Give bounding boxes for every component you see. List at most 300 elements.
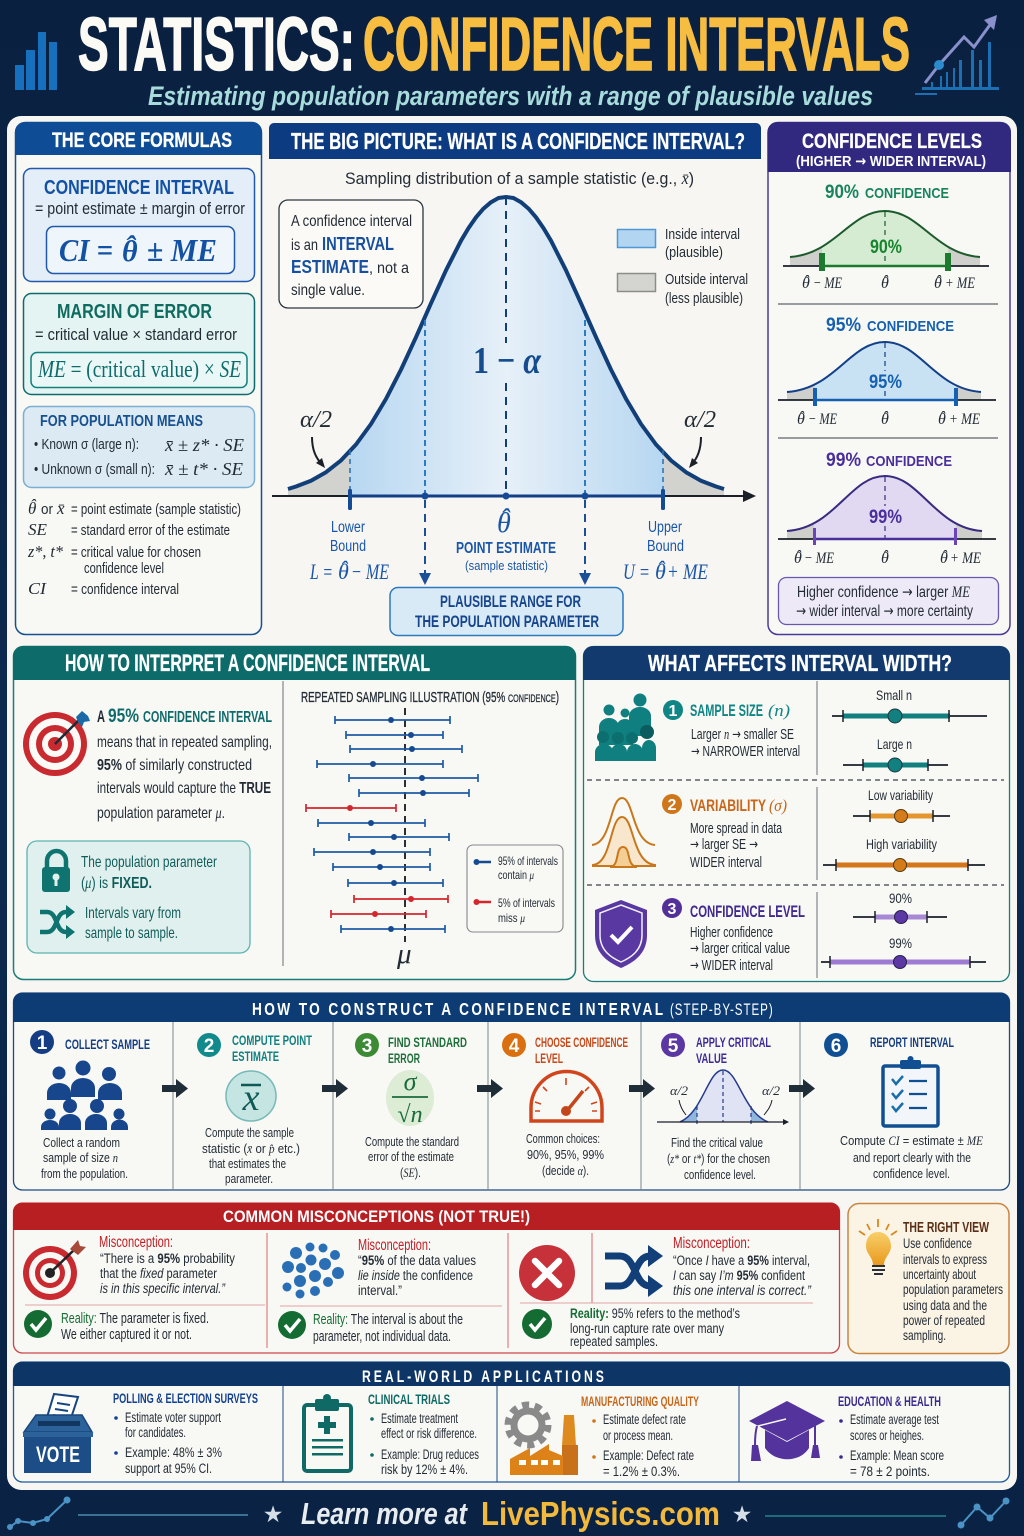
- heading: applications: [13, 1362, 1010, 1387]
- callout: plausible range: [390, 588, 623, 636]
- definitions: x̄: [56, 499, 65, 518]
- legend: intervals: miss μ: [498, 911, 525, 925]
- level: 90 percent: + ME: [945, 275, 975, 292]
- application: polling: for candidates.: [125, 1425, 186, 1440]
- step 2: ESTIMATE: [232, 1049, 279, 1064]
- level: 90 percent: ˆ: [936, 273, 942, 290]
- application: manufacturing: MANUFACTURING QUALITY: [581, 1394, 699, 1409]
- level: 99 percent: + ME: [950, 550, 981, 567]
- definitions: ˆ: [30, 496, 37, 515]
- interval bars: variability: [823, 787, 985, 872]
- application: polling: [23, 1391, 258, 1476]
- level: 95 percent: θ: [881, 411, 889, 428]
- definitions: CI: [28, 579, 47, 598]
- panel: how to construct: [13, 993, 1010, 1190]
- panel: how to interpret: [13, 646, 576, 980]
- factor: variability: [662, 794, 787, 871]
- misconception 2: Reality: The interval is about the: [313, 1312, 463, 1328]
- panel: big picture: [269, 123, 761, 636]
- level: 95 percent: + ME: [949, 411, 980, 428]
- heading: repeated sampling: REPEATED SAMPLING ILLUSTRATION (95% CONFIDENCE): [301, 689, 559, 706]
- arrows to plausible range: [419, 500, 591, 585]
- box: fixed parameter: Intervals vary from: [85, 905, 181, 922]
- step 4: (decide α).: [542, 1163, 589, 1178]
- step 5: (z* or t*) for the chosen: [667, 1151, 770, 1166]
- confidence interval box: CI =: [59, 232, 113, 268]
- chart: repeated intervals: [306, 708, 478, 942]
- box: fixed parameter: The population parameter: [81, 854, 217, 871]
- factor: variability: 2: [668, 797, 677, 814]
- level: 90 percent: θ: [934, 275, 942, 292]
- interval bars: sample size: Small n: [876, 687, 912, 703]
- icon: people: [41, 1060, 128, 1130]
- definitions: = confidence interval: [71, 582, 179, 598]
- arrow 2 to 3: [322, 1079, 348, 1098]
- level: 99 percent: [778, 450, 996, 567]
- step 6: Compute CI = estimate ± ME: [840, 1133, 983, 1148]
- text: definition: 95% of similarly constructed: [97, 757, 252, 774]
- icon: medical clipboard: [304, 1394, 351, 1471]
- callout: plausible range: THE POPULATION PARAMETER: [415, 613, 599, 631]
- icon: gear and factory: [508, 1405, 578, 1475]
- factor: confidence level: CONFIDENCE LEVEL: [690, 902, 805, 921]
- title: STATISTICS:: [78, 2, 355, 86]
- step 6: [824, 1033, 983, 1181]
- application: education: Example: Mean score: [850, 1448, 944, 1463]
- callout: interval estimate: ESTIMATE: [291, 257, 369, 277]
- step 1: Collect a random: [43, 1135, 120, 1150]
- misconception 1: that the fixed parameter: [100, 1266, 217, 1281]
- step 6: and report clearly with the: [853, 1150, 971, 1165]
- step 5: VALUE: [696, 1051, 727, 1066]
- text: definition: intervals would capture the TRUE: [97, 780, 271, 797]
- lower bound: Lower: [331, 519, 365, 536]
- factor: sample size: 1: [669, 703, 678, 720]
- panel: the right view: THE RIGHT VIEW: [903, 1219, 990, 1236]
- step 3: √n: [397, 1102, 423, 1128]
- population means box: FOR POPULATION MEANS: [40, 413, 203, 430]
- misconception 2: lie inside the confidence: [358, 1268, 473, 1283]
- step 3: 3: [362, 1036, 372, 1057]
- note: higher confidence: Higher confidence → larger ME: [797, 583, 970, 601]
- legend: intervals: 5% of intervals: [498, 896, 555, 910]
- chart: critical value: α/2: [762, 1083, 781, 1098]
- misconception 1: Reality: The parameter is fixed.: [61, 1311, 209, 1327]
- level: 99 percent: ˆ: [942, 548, 948, 565]
- step 2: that estimates the: [209, 1156, 286, 1171]
- level: 95 percent: − ME: [808, 411, 837, 428]
- point estimate: [456, 504, 556, 573]
- level: 90 percent: 90%: [870, 237, 902, 258]
- legend: Inside interval: [665, 226, 740, 243]
- panel: the right view: using data and the: [903, 1297, 987, 1313]
- icon: shuffle: [40, 905, 75, 939]
- icon: star left: ★: [263, 1501, 283, 1527]
- step 1: [30, 1030, 150, 1181]
- note: higher confidence: → wider interval → more certainty: [796, 602, 973, 620]
- level: 99 percent: θ: [794, 550, 802, 567]
- factor: sample size: Larger n → smaller SE: [691, 727, 794, 743]
- icon: shield: [595, 900, 647, 968]
- misconception 3: Reality: 95% refers to the method’s: [570, 1306, 740, 1321]
- step 2: COMPUTE POINT: [232, 1033, 313, 1048]
- legend: intervals: [467, 845, 563, 932]
- interval bars: sample size: Large n: [877, 736, 912, 752]
- callout: plausible range: PLAUSIBLE RANGE FOR: [440, 593, 581, 611]
- callout: interval estimate: single value.: [291, 282, 365, 299]
- population means box: x̄ ± z* · SE: [164, 435, 244, 455]
- step 5: [657, 1033, 789, 1182]
- application: clinical trials: Example: Drug reduces: [381, 1447, 479, 1462]
- level: 99 percent: ˆ: [882, 548, 888, 565]
- heading: what affects: [583, 646, 1010, 680]
- confidence interval box: θ: [122, 235, 138, 268]
- icon: light bulb: [859, 1219, 897, 1274]
- misconception 2: parameter, not individual data.: [313, 1329, 451, 1345]
- step 4: Common choices:: [526, 1131, 600, 1146]
- level: 95 percent: [778, 315, 996, 428]
- heading: construct: HOW TO CONSTRUCT A CONFIDENCE INTERVAL: [252, 1000, 663, 1020]
- step 2: parameter.: [225, 1171, 273, 1186]
- heading: interpret: HOW TO INTERPRET A CONFIDENCE INTERVAL: [65, 650, 430, 677]
- icon: clipboard: [883, 1056, 938, 1126]
- step 1: sample of size n: [43, 1150, 118, 1165]
- application: manufacturing: Estimate defect rate: [603, 1412, 686, 1427]
- point estimate: ˆ: [500, 504, 511, 535]
- text: definition: 95%: [108, 706, 139, 727]
- icon: bar chart: [15, 32, 57, 90]
- arrow 1 to 2: [162, 1079, 188, 1098]
- misconception 1: Misconception:: [99, 1234, 173, 1251]
- population means box: • Unknown σ (small n):: [34, 461, 155, 478]
- level: 95 percent: 95%: [869, 372, 902, 393]
- chart: critical value: α/2: [670, 1083, 689, 1098]
- icon: shuffle: [605, 1245, 663, 1297]
- upper bound: [623, 519, 708, 584]
- level: 90 percent: CONFIDENCE: [865, 185, 949, 202]
- level: 90 percent: 90%: [825, 182, 859, 203]
- level: 90 percent: ˆ: [804, 273, 810, 290]
- application: polling: POLLING & ELECTION SURVEYS: [113, 1391, 258, 1406]
- factor: sample size: [663, 700, 800, 760]
- step 3: Compute the standard: [365, 1134, 459, 1149]
- upper bound: U =: [623, 559, 650, 584]
- footer: [7, 1495, 1010, 1532]
- application: education: [749, 1394, 944, 1479]
- level: 99 percent: θ: [881, 550, 889, 567]
- definitions: θ: [28, 499, 36, 518]
- step 4: LEVEL: [535, 1051, 563, 1066]
- step 4: [502, 1033, 628, 1178]
- upper bound: Upper: [648, 519, 682, 536]
- bell curve chart: [272, 197, 756, 510]
- footer text: Learn more at: [301, 1496, 468, 1531]
- misconception 3: repeated samples.: [570, 1334, 658, 1349]
- step 5: APPLY CRITICAL: [696, 1035, 771, 1050]
- interval bars: confidence level: 90%: [889, 890, 912, 906]
- step 3: error of the estimate: [368, 1149, 454, 1164]
- icon: right line chart: [958, 1498, 1010, 1528]
- factor: variability: More spread in data: [690, 821, 783, 837]
- definitions: = critical value for chosen: [71, 545, 201, 561]
- heading: construct: (STEP-BY-STEP): [670, 1001, 773, 1020]
- interval bars: sample size: [832, 687, 987, 772]
- icon: graduation cap: [749, 1401, 825, 1461]
- misconception 1: “There is a 95% probability: [100, 1251, 235, 1266]
- definitions: = point estimate (sample statistic): [71, 502, 241, 518]
- upper bound: ˆ: [657, 556, 666, 581]
- icon: data dots: [282, 1242, 344, 1298]
- heading: confidence levels: [768, 122, 1011, 172]
- level: 90 percent: ˆ: [882, 273, 888, 290]
- definitions: confidence level: [84, 561, 164, 577]
- level: 99 percent: 99%: [826, 450, 861, 471]
- icon: lock: [42, 851, 70, 892]
- factor: variability: VARIABILITY: [690, 796, 766, 815]
- factor: confidence level: Higher confidence: [690, 925, 773, 941]
- panel: what affects interval width: [583, 646, 1010, 982]
- confidence interval box: [24, 168, 254, 282]
- icon: bell curves: [592, 798, 655, 867]
- misconception 3: “Once I have a 95% interval,: [673, 1253, 810, 1268]
- subtitle: Estimating population parameters with a range of plausible values: [148, 81, 873, 111]
- step 2: 2: [204, 1036, 214, 1057]
- factor: variability: → larger SE →: [690, 837, 758, 853]
- level: 90 percent: − ME: [813, 275, 842, 292]
- margin of error box: ME = (critical value) × SE: [37, 357, 241, 383]
- text: definition: A: [97, 708, 105, 726]
- application: education: EDUCATION & HEALTH: [838, 1394, 941, 1409]
- box: fixed parameter: [27, 841, 250, 953]
- confidence interval box: = point estimate ± margin of error: [35, 200, 245, 218]
- heading: core formulas: [15, 122, 262, 155]
- icon: gauge: [531, 1071, 602, 1121]
- step 3: (SE).: [400, 1165, 421, 1180]
- level: 99 percent: 99%: [869, 507, 902, 528]
- confidence interval box: ± ME: [147, 232, 217, 268]
- step 4: 90%, 95%, 99%: [527, 1147, 604, 1162]
- icon: ballot box: [23, 1394, 93, 1473]
- footer text: LivePhysics.com: [481, 1495, 720, 1532]
- icon: target: [23, 1240, 86, 1300]
- step 5: Find the critical value: [671, 1135, 763, 1150]
- definitions: [27, 496, 241, 598]
- upper bound: Bound: [647, 538, 684, 555]
- application: polling: Estimate voter support: [125, 1410, 221, 1425]
- population means box: x̄ ± t* · SE: [164, 459, 243, 479]
- misconception 3: [519, 1235, 811, 1349]
- lower bound: θ: [338, 559, 349, 584]
- application: manufacturing: [508, 1394, 699, 1479]
- application: manufacturing: or process mean.: [603, 1428, 673, 1443]
- confidence interval box: CONFIDENCE INTERVAL: [44, 177, 234, 199]
- panel: the right view: sampling.: [903, 1327, 946, 1343]
- legend: (plausible): [665, 244, 723, 261]
- margin of error box: = critical value × standard error: [35, 326, 237, 344]
- application: clinical trials: [304, 1392, 479, 1477]
- point estimate: (sample statistic): [465, 558, 548, 573]
- factor: sample size: SAMPLE SIZE: [690, 701, 763, 720]
- level: 95 percent: 95%: [826, 315, 861, 336]
- misconception 1: We either captured it or not.: [61, 1327, 192, 1343]
- point estimate: POINT ESTIMATE: [456, 540, 556, 557]
- interval bars: confidence level: [821, 890, 986, 968]
- heading: confidence levels: (HIGHER → WIDER INTERVAL): [796, 152, 986, 170]
- heading: big picture: THE BIG PICTURE: WHAT IS A CONFIDENCE INTERVAL?: [291, 128, 745, 154]
- step 1: from the population.: [41, 1166, 128, 1181]
- heading: confidence levels: CONFIDENCE LEVELS: [802, 130, 982, 153]
- callout: interval estimate: is an: [291, 237, 318, 254]
- step 5: 5: [668, 1036, 679, 1057]
- level: 99 percent: ˆ: [796, 548, 802, 565]
- heading: construct: [13, 993, 1010, 1022]
- callout: interval estimate: INTERVAL: [322, 234, 394, 254]
- subtitle: sampling distribution: Sampling distribution of a sample statistic (e.g., x̄): [345, 169, 694, 188]
- step 2: statistic (x̄ or p̂ etc.): [202, 1141, 300, 1156]
- icon: x mark: [519, 1245, 575, 1301]
- legend: [618, 226, 748, 307]
- chart: critical value: [657, 1070, 789, 1126]
- application: clinical trials: Estimate treatment: [381, 1411, 458, 1426]
- arrow 4 to 5: [629, 1079, 655, 1098]
- heading: core formulas: THE CORE FORMULAS: [52, 129, 232, 152]
- factor: sample size: → NARROWER interval: [691, 744, 800, 760]
- application: clinical trials: risk by 12% ± 4%.: [381, 1462, 468, 1477]
- application: clinical trials: CLINICAL TRIALS: [368, 1392, 450, 1407]
- upper bound: + ME: [667, 559, 708, 584]
- misconception 3: this one interval is correct.”: [673, 1283, 811, 1298]
- confidence interval box: ˆ: [125, 230, 137, 263]
- level: 95 percent: θ: [938, 411, 946, 428]
- level: 99 percent: CONFIDENCE: [866, 453, 952, 470]
- misconception 3: I can say I’m 95% confident: [673, 1268, 805, 1283]
- panel: the right view: intervals to express: [903, 1251, 987, 1267]
- step 4: CHOOSE CONFIDENCE: [535, 1035, 628, 1050]
- step 2: x: [242, 1077, 260, 1119]
- application: education: scores or heighes.: [850, 1428, 924, 1443]
- interval bars: variability: Low variability: [868, 787, 933, 803]
- step 6: REPORT INTERVAL: [870, 1035, 954, 1050]
- misconception 3: Misconception:: [673, 1235, 750, 1252]
- icon: check: [278, 1311, 306, 1339]
- text: definition: population parameter μ.: [97, 805, 225, 822]
- step 1: 1: [37, 1033, 48, 1054]
- misconception 2: Misconception:: [358, 1237, 431, 1254]
- icon: left line chart: [7, 1496, 70, 1530]
- label: mu: μ: [396, 938, 412, 970]
- step 3: σ: [404, 1067, 418, 1096]
- lower bound: Bound: [330, 538, 366, 555]
- box: fixed parameter: sample to sample.: [85, 925, 178, 942]
- margin of error box: [24, 294, 254, 394]
- label: left tail: [300, 407, 332, 468]
- misconception 2: “95% of the data values: [358, 1253, 476, 1268]
- step 3: [355, 1033, 467, 1180]
- panel: misconceptions: [13, 1203, 840, 1353]
- step 2: [197, 1033, 313, 1186]
- panel: core formulas: [15, 122, 262, 634]
- heading: misconceptions: [13, 1203, 840, 1230]
- definitions: SE: [28, 520, 48, 539]
- step 2: Compute the sample: [205, 1125, 294, 1140]
- heading: big picture: [269, 123, 761, 159]
- margin of error box: MARGIN OF ERROR: [57, 301, 212, 323]
- step 3: FIND STANDARD: [388, 1035, 467, 1050]
- level: 95 percent: ˆ: [940, 409, 946, 426]
- callout: interval estimate: A confidence interval: [291, 213, 412, 230]
- step 6: confidence level.: [873, 1166, 950, 1181]
- icon: group of people: [595, 694, 656, 761]
- misconception 2: interval.”: [358, 1283, 402, 1298]
- icon: rising chart: [915, 15, 999, 95]
- label: 1 minus alpha: 1 − α: [473, 340, 542, 382]
- application: polling: Example: 48% ± 3%: [125, 1445, 222, 1460]
- application: manufacturing: Example: Defect rate: [603, 1448, 694, 1463]
- level: 99 percent: − ME: [804, 550, 834, 567]
- point estimate: θ: [497, 508, 511, 539]
- level: 95 percent: CONFIDENCE: [867, 318, 954, 335]
- application: polling: support at 95% CI.: [125, 1461, 212, 1476]
- text: definition: CONFIDENCE INTERVAL: [143, 709, 272, 726]
- arrow 3 to 4: [477, 1079, 503, 1098]
- callout: interval estimate: , not a: [369, 260, 409, 277]
- lower bound: − ME: [351, 559, 389, 584]
- label: left tail: α/2: [300, 407, 332, 433]
- definitions: or: [41, 502, 53, 518]
- application: education: = 78 ± 2 points.: [850, 1464, 930, 1479]
- icon: ballot box: VOTE: [36, 1442, 80, 1467]
- application: education: Estimate average test: [850, 1412, 939, 1427]
- heading: misconceptions: COMMON MISCONCEPTIONS (NOT TRUE!): [223, 1208, 530, 1226]
- misconception 1: is in this specific interval.”: [100, 1281, 225, 1296]
- application: clinical trials: effect or risk difference.: [381, 1426, 477, 1441]
- step 4: 4: [509, 1036, 520, 1057]
- heading: interpret: [13, 646, 576, 680]
- label: right tail: [684, 407, 716, 468]
- step 5: confidence level.: [684, 1167, 756, 1182]
- panel: the right view: [848, 1204, 1009, 1354]
- upper bound: θ: [655, 559, 666, 584]
- factor: variability: WIDER interval: [690, 855, 762, 871]
- lower bound: [309, 519, 389, 584]
- level: 95 percent: θ: [797, 411, 805, 428]
- step 3: ERROR: [388, 1051, 420, 1066]
- factor: confidence level: [662, 898, 805, 974]
- misconception 2: [278, 1237, 476, 1345]
- heading: applications: REAL-WORLD APPLICATIONS: [362, 1368, 604, 1387]
- panel: real-world applications: [13, 1362, 1010, 1482]
- panel: the right view: uncertainty about: [903, 1266, 976, 1282]
- level: 90 percent: θ: [802, 275, 810, 292]
- factor: confidence level: → WIDER interval: [690, 958, 773, 974]
- misconception 3: long-run capture rate over many: [570, 1321, 724, 1336]
- level: 90 percent: θ: [881, 275, 889, 292]
- icon: star right: ★: [732, 1501, 752, 1527]
- icon: check: [24, 1310, 52, 1338]
- interval bars: variability: High variability: [866, 836, 937, 852]
- population means box: [24, 406, 254, 488]
- text: definition: [97, 706, 272, 822]
- footer text: [301, 1495, 720, 1532]
- definitions: = standard error of the estimate: [71, 523, 230, 539]
- factor: confidence level: → larger critical value: [690, 941, 790, 957]
- icon: check: [522, 1309, 552, 1339]
- definitions: z*, t*: [27, 542, 63, 561]
- legend: intervals: contain μ: [498, 868, 534, 882]
- panel: the right view: power of repeated: [903, 1312, 985, 1328]
- lower bound: ˆ: [340, 556, 349, 581]
- note: higher confidence: [778, 578, 998, 624]
